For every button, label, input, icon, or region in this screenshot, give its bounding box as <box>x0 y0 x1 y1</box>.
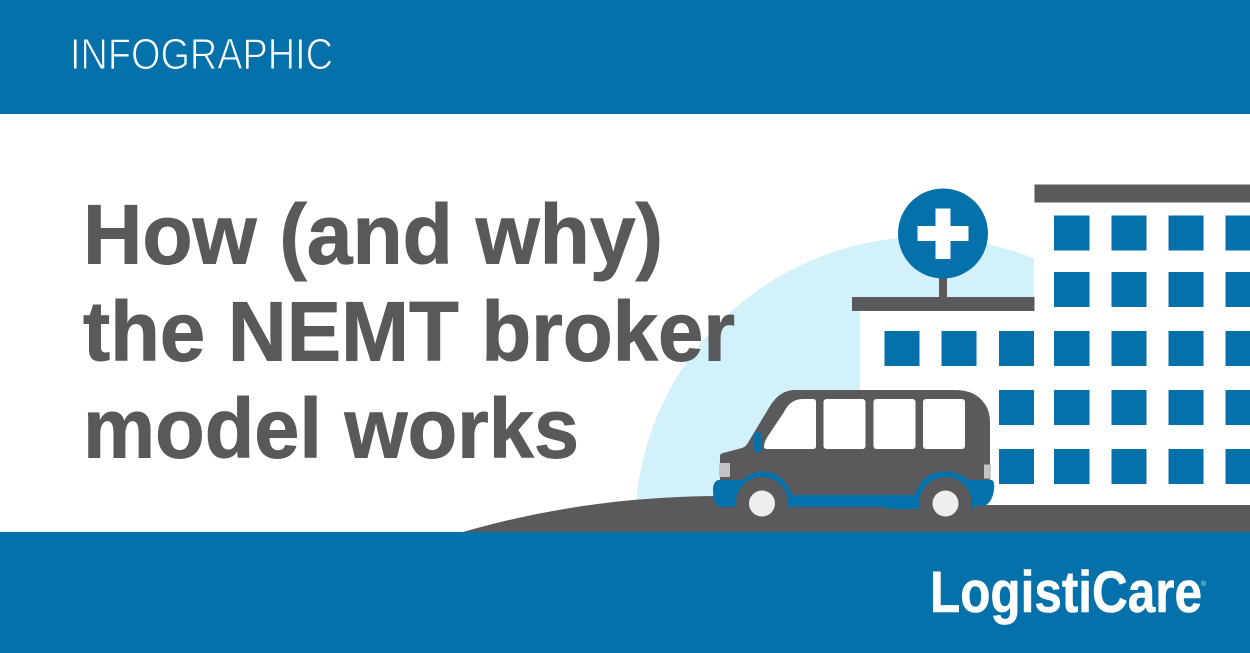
title <box>83 188 735 476</box>
lower roof <box>852 297 1034 311</box>
sign pole <box>939 275 947 299</box>
logo wordmark: LogistiCare <box>930 560 1202 625</box>
van front window <box>764 399 816 449</box>
logo wordmark: ® <box>1201 580 1207 588</box>
icon: medical cross sign <box>898 188 988 278</box>
title: the NEMT broker <box>83 284 735 378</box>
building white body <box>860 200 1250 532</box>
building windows <box>884 216 1250 484</box>
illustration background: light blue circle <box>635 237 1215 532</box>
bottom banner <box>0 532 1250 653</box>
van lights <box>719 463 730 477</box>
van wheels <box>736 477 972 529</box>
title: How (and why) <box>83 188 663 282</box>
hospital building <box>852 184 1250 532</box>
road <box>463 496 1250 532</box>
van body <box>720 390 990 500</box>
top banner <box>0 0 1250 114</box>
van side windows <box>824 399 965 449</box>
icon: van <box>713 390 994 529</box>
title: model works <box>83 382 579 476</box>
upper roof <box>1034 184 1250 202</box>
banner label: INFOGRAPHIC <box>70 31 333 79</box>
van door mirror <box>754 432 762 452</box>
van blue trim <box>713 472 994 509</box>
